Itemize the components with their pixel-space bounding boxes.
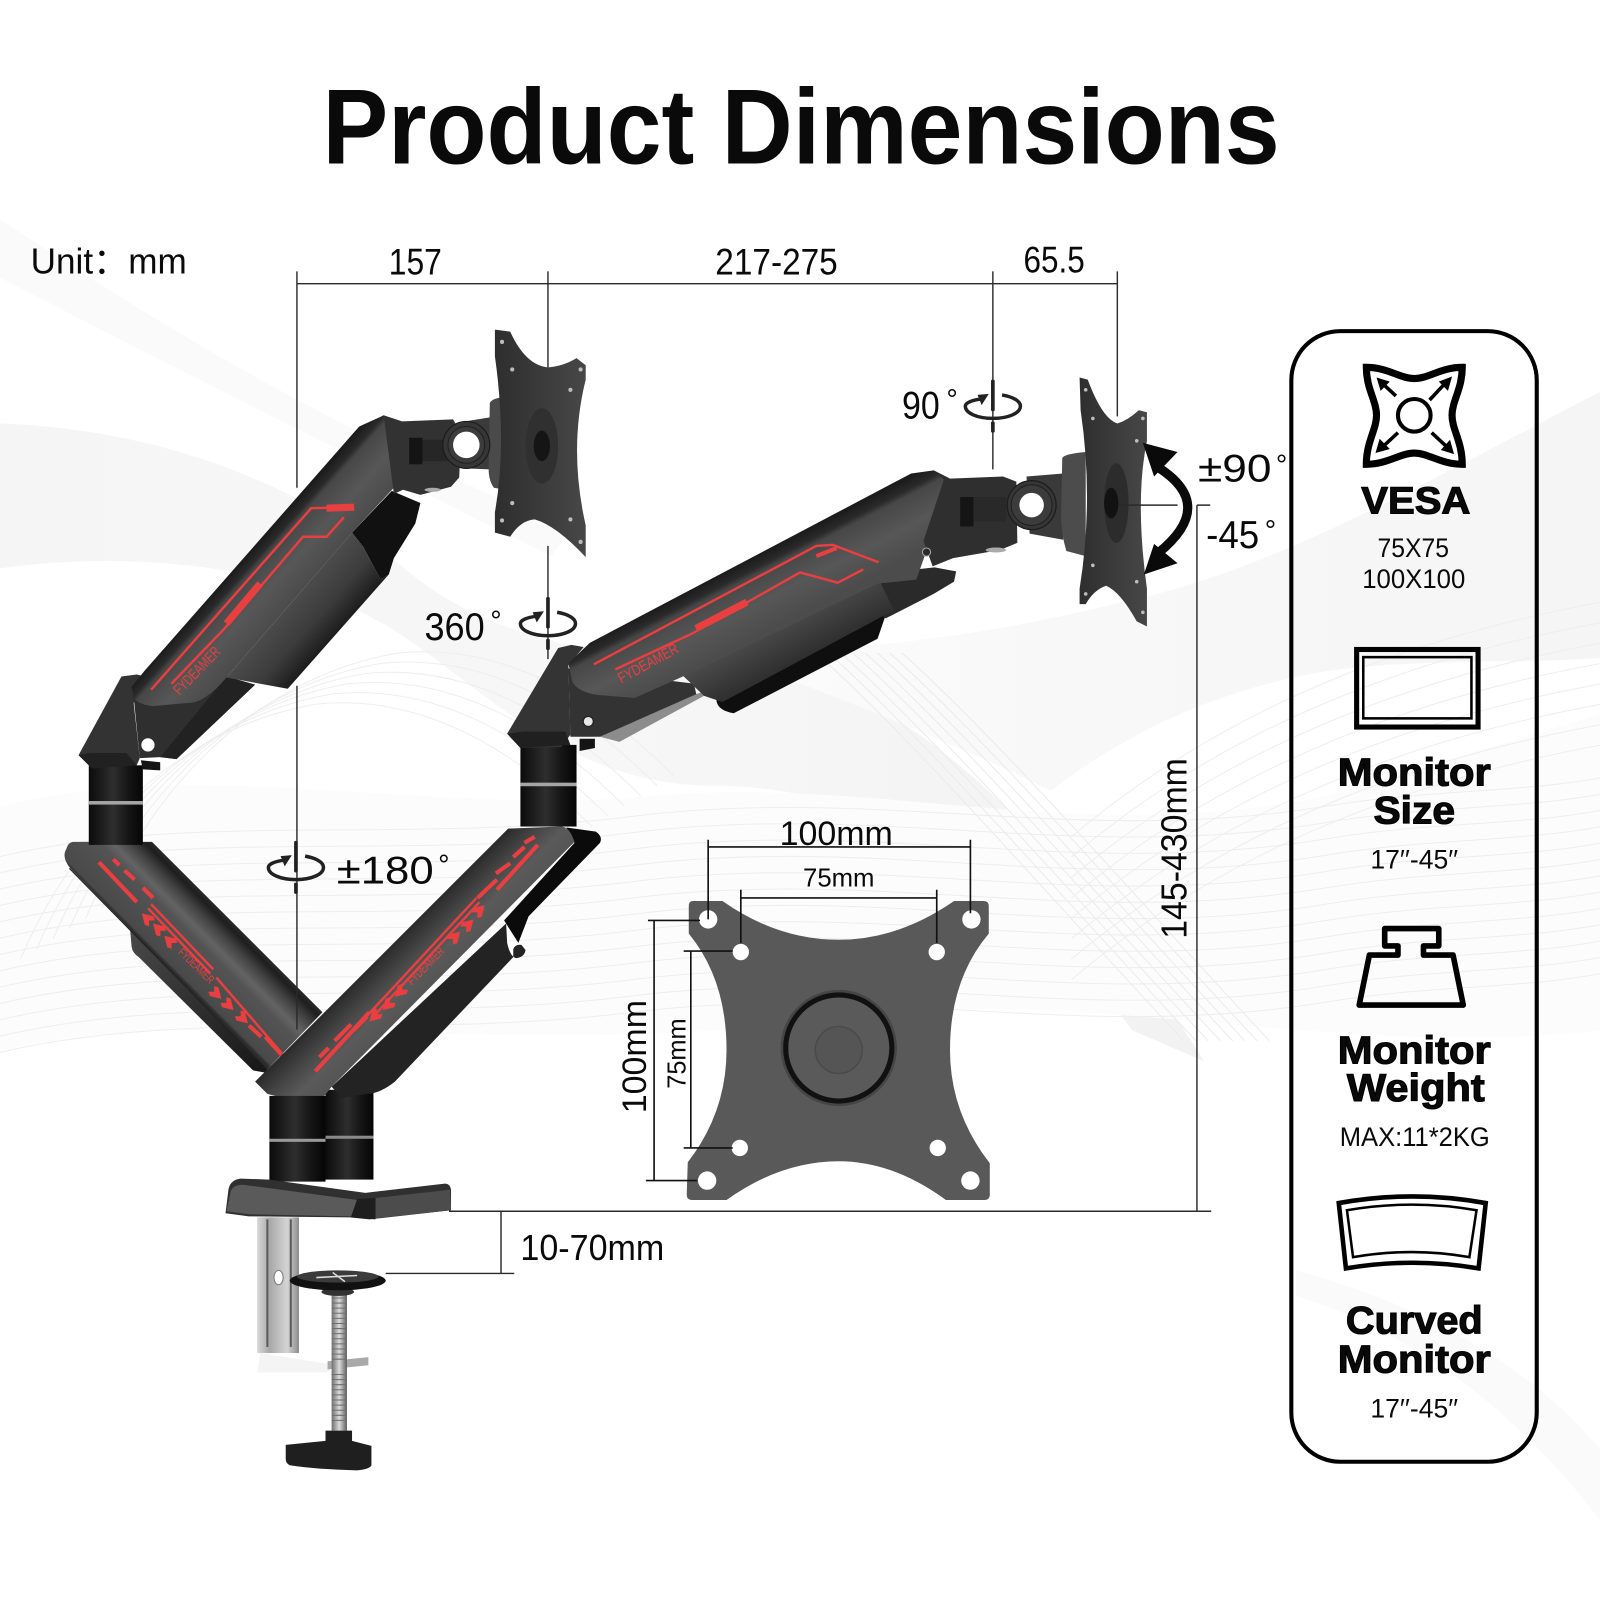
- left plate connector: [489, 397, 505, 490]
- rotation label 90: 90: [902, 384, 940, 427]
- VESA sizes: 75X75: [1378, 533, 1449, 563]
- VESA heading: VESA: [1361, 479, 1470, 521]
- curved monitor heading: [1338, 1300, 1491, 1381]
- monitor weight value: MAX:11*2KG: [1340, 1122, 1490, 1152]
- right upper arm black rail: [716, 609, 888, 713]
- left upper arm column: [89, 765, 143, 845]
- unit label: Unit：mm: [31, 241, 187, 281]
- right ball arm: [1027, 473, 1063, 540]
- rotation icon 180: [268, 841, 323, 894]
- panel outline: [1291, 331, 1537, 1462]
- right upper arm column: [520, 745, 577, 827]
- right upper arm side panel: [568, 668, 697, 737]
- monitor arm product: [65, 330, 1147, 1470]
- label 100mm vertical: 100mm: [616, 1000, 654, 1113]
- clamp knob: [286, 1431, 371, 1470]
- right lower arm tube: [332, 923, 526, 1098]
- right lower arm rear bracket: [504, 828, 601, 943]
- rotation label 180: ±180: [337, 850, 434, 893]
- mounting holes: [698, 910, 981, 1190]
- monitor size heading: [1338, 752, 1491, 832]
- tilt label plus minus 90: ±90: [1198, 448, 1271, 491]
- tilt arrow: [1118, 443, 1188, 574]
- right pivot dot: [583, 716, 593, 727]
- dimension label 157: 157: [389, 241, 442, 282]
- left upper arm side panel: [134, 677, 255, 759]
- rotation label 360: 360: [424, 606, 485, 649]
- brand text: FYDEAMER: [615, 641, 682, 687]
- height dimension lines: [386, 505, 1211, 1273]
- label 75mm vertical: 75mm: [664, 1018, 692, 1089]
- right upper arm top face: [568, 470, 950, 698]
- left upper arm joint: [79, 674, 160, 770]
- brand text: FYDEAMER: [170, 644, 224, 699]
- icon: VESA: [1366, 367, 1462, 464]
- VESA sizes: 100X100: [1362, 564, 1465, 594]
- top width dimension lines: [297, 271, 1117, 1030]
- desk base: [226, 1179, 451, 1219]
- right upper arm joint: [507, 645, 595, 751]
- degree mark: °: [946, 384, 958, 416]
- clamp pressure plate: [290, 1270, 386, 1296]
- left upper arm cradle: [352, 491, 420, 580]
- desk clamp steel bracket: [257, 1217, 368, 1372]
- right upper arm red decor: [594, 545, 879, 687]
- curved monitor range: 17′′-45′′: [1370, 1393, 1458, 1423]
- left swivel ball: [443, 421, 490, 468]
- left upper arm top face: [132, 415, 394, 706]
- right monitor plate: [1080, 378, 1147, 627]
- rotation icon 360: [520, 597, 576, 650]
- degree mark: °: [1265, 515, 1276, 547]
- left ball arm: [465, 417, 490, 469]
- height label: 145-430mm: [1155, 758, 1195, 939]
- degree mark: °: [490, 606, 502, 638]
- right upper arm grey strip: [600, 684, 727, 742]
- monitor size range: 17′′-45′′: [1370, 844, 1458, 874]
- label 100mm horizontal: 100mm: [780, 815, 893, 853]
- title: Product Dimensions: [322, 66, 1280, 186]
- rotation icon 90: [965, 380, 1020, 433]
- plate body: [687, 901, 990, 1200]
- monitor weight heading: Monitor: [1338, 1029, 1491, 1072]
- plate dimension lines: [646, 840, 970, 1181]
- clamp thickness label: 10-70mm: [520, 1228, 664, 1268]
- label 75mm horizontal: 75mm: [803, 865, 874, 893]
- right upper arm shroud: [681, 577, 894, 702]
- icon: curved monitor: [1339, 1196, 1486, 1268]
- left head link: [384, 415, 461, 495]
- degree mark: °: [438, 849, 450, 881]
- right upper arm lower link: [867, 567, 956, 618]
- clamp screw: [332, 1290, 347, 1431]
- right swivel ball: [1007, 481, 1056, 530]
- monitor weight heading: Weight: [1347, 1067, 1485, 1110]
- VESA plate diagram: [616, 815, 990, 1200]
- dimension label 217-275: 217-275: [715, 241, 838, 282]
- right head link: [922, 470, 1017, 566]
- left pivot dot: [141, 738, 155, 752]
- rear base column: [326, 1090, 373, 1180]
- plate centre ring: [781, 990, 897, 1106]
- monitor size heading: Size: [1373, 789, 1455, 832]
- curved monitor heading: Monitor: [1338, 1338, 1491, 1381]
- curved monitor heading: Curved: [1346, 1300, 1483, 1343]
- monitor weight heading: [1338, 1029, 1491, 1110]
- lower left arm: [65, 842, 322, 1073]
- left upper arm shroud: [227, 533, 389, 689]
- right lower arm red decor: [315, 837, 538, 1071]
- right lower arm face: [255, 827, 574, 1097]
- left upper arm underside strip: [160, 677, 255, 759]
- tilt label minus 45: -45: [1206, 514, 1259, 557]
- degree mark: °: [1276, 449, 1287, 481]
- front base column: [269, 1096, 326, 1182]
- brand text: FYDEAMER: [175, 947, 216, 986]
- left upper arm red decor: [151, 507, 354, 699]
- icon: monitor: [1357, 649, 1478, 727]
- VESA sizes: [1362, 533, 1465, 594]
- right plate connector: [1061, 452, 1086, 556]
- dimension label 65.5: 65.5: [1023, 239, 1085, 280]
- icon: weight: [1359, 929, 1463, 1005]
- left monitor plate: [495, 330, 586, 557]
- monitor size heading: Monitor: [1338, 752, 1491, 795]
- panel: specifications: [1291, 331, 1537, 1462]
- brand text: FYDEAMER: [404, 944, 447, 988]
- red decor on lower left arm: [99, 859, 284, 1057]
